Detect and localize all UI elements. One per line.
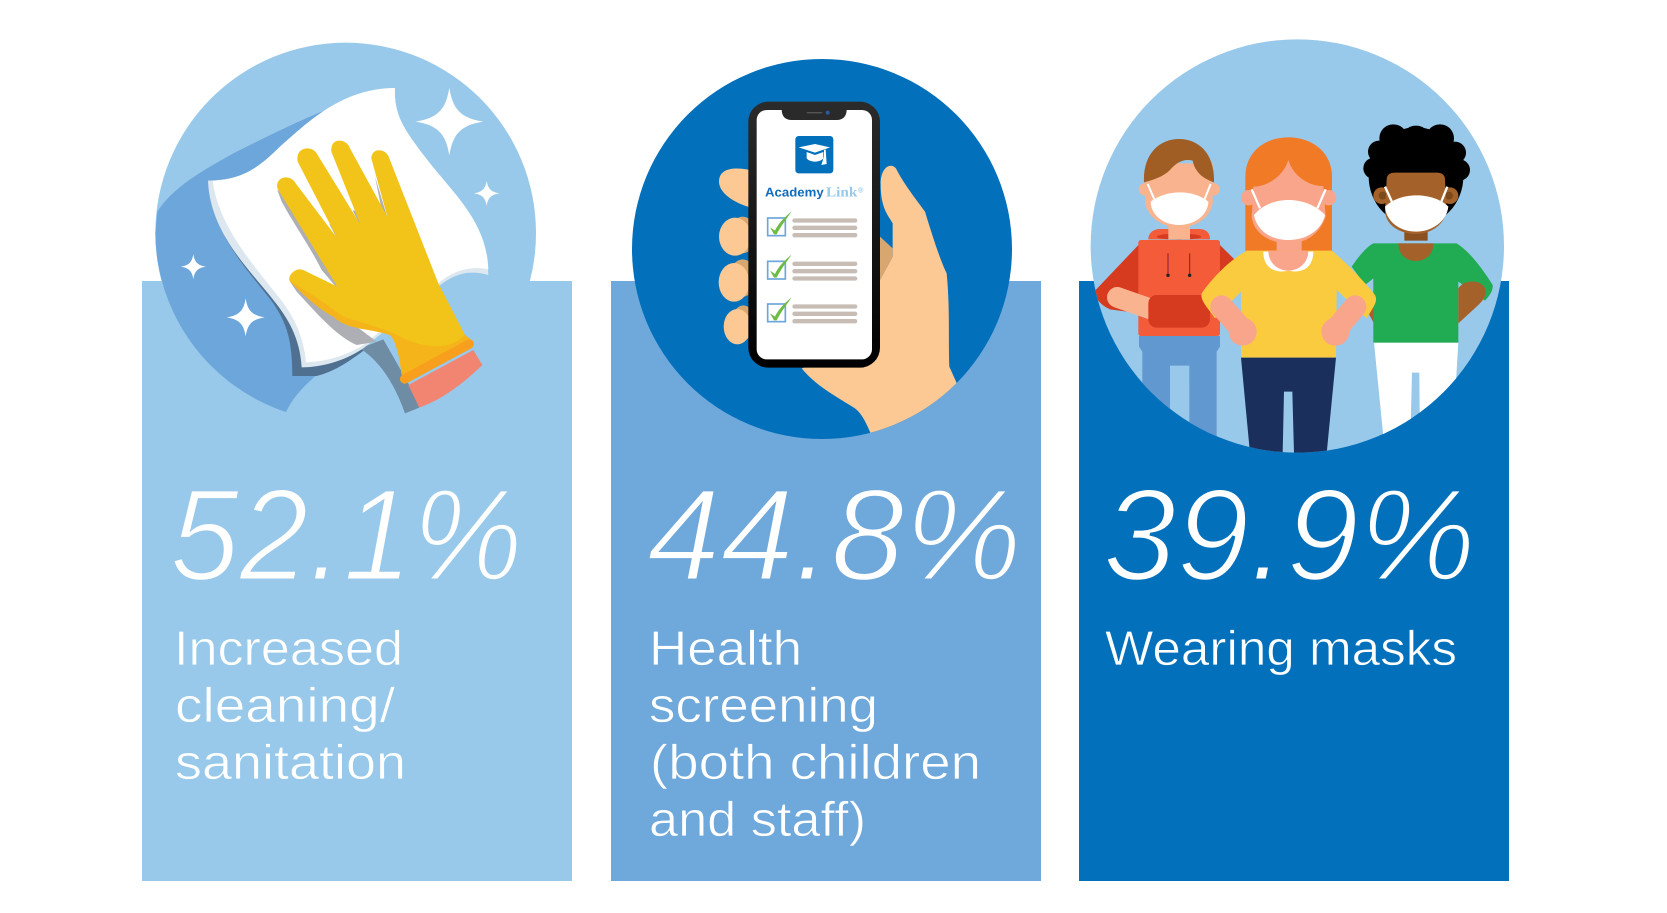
fingers	[719, 169, 756, 344]
illustration circle	[155, 43, 536, 423]
statistic: 52.1%: 52.1%	[170, 461, 523, 608]
panel background: health screening	[611, 281, 1041, 881]
label: increased cleaning/sanitation	[174, 622, 406, 790]
statistic: 44.8%: 44.8%	[647, 461, 1022, 608]
hair	[1363, 124, 1470, 226]
app name: Academy	[765, 186, 824, 200]
label: health screening	[649, 622, 981, 847]
illustration: gloved hand wiping with cloth	[155, 43, 536, 423]
person: child in green shirt	[1352, 124, 1493, 453]
label: wearing masks: Wearing masks	[1105, 622, 1457, 676]
checklist item 3	[768, 297, 857, 323]
label: increased cleaning/sanitation: Increased	[174, 622, 403, 676]
statistic: 39.9%: 39.9%	[1103, 461, 1476, 608]
cloth	[208, 88, 488, 367]
sleeve	[408, 350, 482, 408]
app name accent: Link	[826, 185, 858, 200]
arm shadow	[360, 339, 419, 413]
panel background: cleaning	[142, 281, 572, 881]
illustration: hand holding phone	[632, 59, 1012, 457]
panel background: wearing masks	[1079, 281, 1509, 881]
person: girl in yellow shirt	[1201, 137, 1376, 453]
illustration: three people in masks	[1091, 39, 1504, 453]
checklist item 1	[768, 211, 857, 237]
glove shadow	[277, 177, 387, 345]
app icon: graduation cap	[795, 136, 833, 173]
glove cuff	[405, 344, 469, 379]
cleaned swoosh area	[155, 103, 343, 412]
checklist item 2	[768, 255, 857, 281]
panel: wearing masks	[1079, 39, 1509, 881]
phone	[748, 102, 880, 368]
illustration circle	[1091, 39, 1504, 453]
label: increased cleaning/sanitation: sanitation	[175, 736, 406, 790]
label: increased cleaning/sanitation: cleaning/	[175, 679, 395, 733]
glove	[277, 141, 473, 375]
person: boy in red hoodie	[1095, 139, 1235, 453]
illustration circle	[632, 59, 1012, 439]
label: health screening: Health	[649, 622, 802, 676]
label: health screening: and staff)	[649, 793, 866, 847]
panel: cleaning	[142, 43, 572, 881]
sparkle small left	[181, 254, 206, 279]
sparkle small right	[474, 181, 499, 206]
label: health screening: (both children	[650, 736, 981, 790]
sparkle large	[415, 88, 483, 156]
sparkle medium	[227, 298, 265, 336]
registered mark: ®	[858, 186, 863, 194]
cloth shadow	[213, 210, 367, 376]
infographic canvas	[142, 39, 1509, 881]
glove shading	[290, 282, 473, 375]
label: health screening: screening	[649, 679, 878, 733]
hand	[802, 166, 958, 457]
panel: health screening	[611, 59, 1041, 881]
